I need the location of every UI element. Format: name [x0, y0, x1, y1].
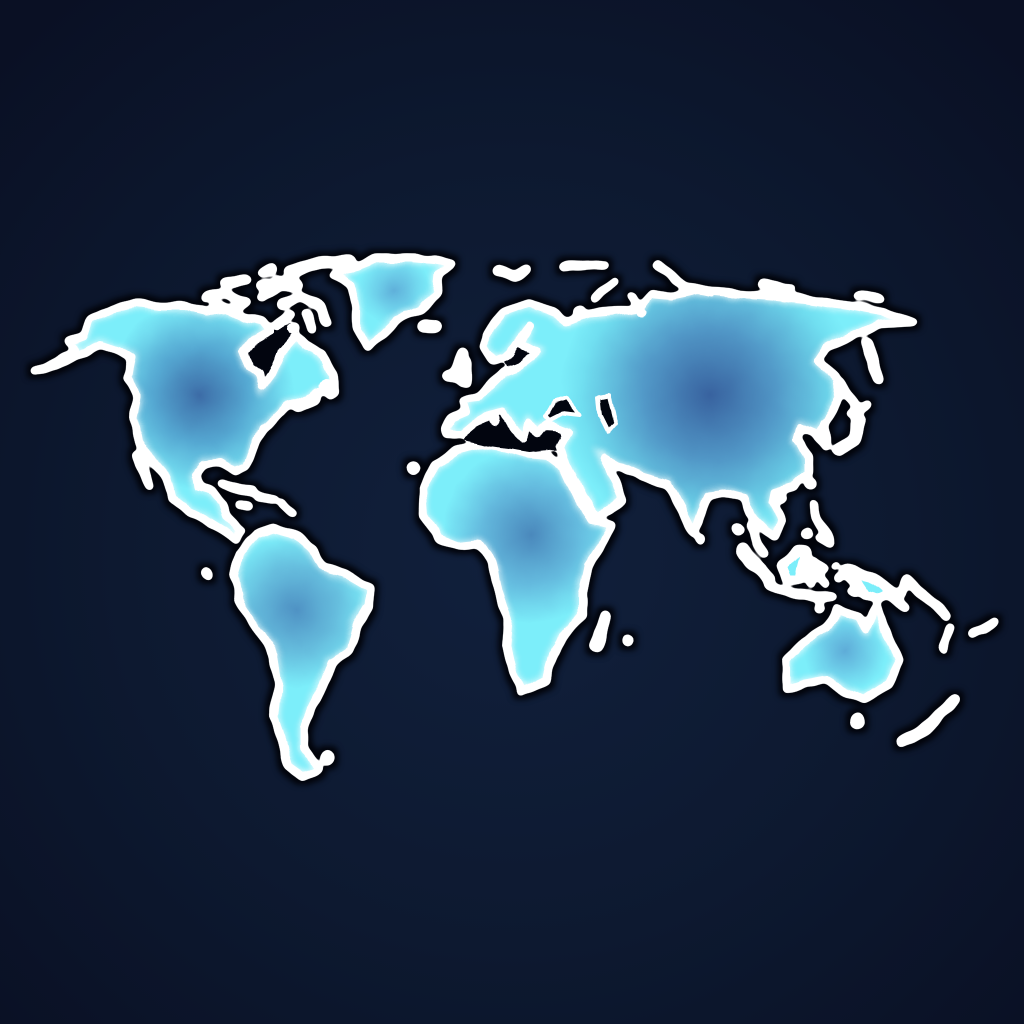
Falkland dot [320, 750, 336, 766]
Arctic Eurasia islands [498, 270, 526, 276]
Tasmania [850, 714, 866, 730]
Newfoundland [298, 386, 330, 406]
British Isles [448, 354, 466, 382]
continent: South America [201, 528, 370, 776]
Arctic archipelago [206, 270, 276, 310]
Korea peninsula [824, 424, 826, 446]
Taiwan [805, 477, 817, 489]
Black Sea gap [546, 398, 580, 420]
Sulawesi [810, 562, 826, 584]
Iceland [424, 320, 436, 332]
Hainan [775, 492, 787, 504]
Java [768, 584, 834, 598]
world map [34, 258, 994, 776]
Sri Lanka dot [695, 535, 705, 545]
islands: New Zealand and Pacific [900, 580, 994, 742]
New Guinea [846, 570, 892, 598]
Caspian gap [598, 396, 615, 432]
Comoros dot [622, 634, 634, 646]
Canary Islands dot [408, 463, 420, 475]
Philippines [815, 504, 830, 542]
Kamchatka [866, 344, 878, 378]
continent: Africa [408, 444, 634, 692]
Borneo [782, 550, 806, 580]
Galapagos dot [201, 567, 213, 579]
continent: Eurasia [446, 264, 914, 613]
Andaman dot [731, 523, 743, 535]
Baja California [138, 454, 150, 486]
Caribbean islands [222, 484, 292, 514]
Madagascar [596, 618, 606, 646]
Mediterranean islands [488, 414, 500, 426]
Mediterranean shadow [462, 416, 566, 452]
continent: Greenland [332, 258, 452, 347]
continent: Australia [786, 606, 900, 730]
Japan [840, 382, 866, 414]
Sumatra [742, 550, 768, 578]
continent: North America [34, 260, 350, 538]
